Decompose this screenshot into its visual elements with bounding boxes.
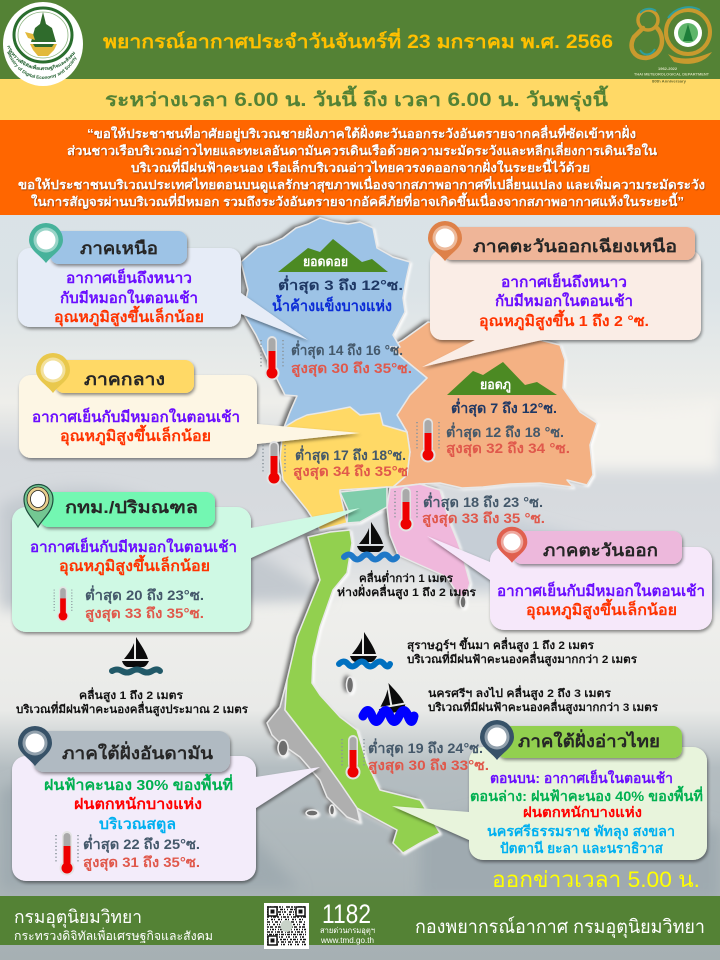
temperatures: north: ต่ำสุด 14 ถึง 16 °ซ. <box>291 340 403 359</box>
panel: north: อากาศเย็นถึงหนาว <box>66 268 192 287</box>
panel: north: กับมีหมอกในตอนเช้า <box>60 289 198 307</box>
warning banner: ในการสัญจรผ่านบริเวณที่มีหมอก รวมถึงระวังอันตรายจากอัคคีภัยที่อาจเกิดขึ้นเนื่องจากสภาพอากาศแห้งในระยะนี้” <box>31 192 684 209</box>
temperatures: north: สูงสุด 30 ถึง 35°ซ. <box>291 360 412 377</box>
temperatures: south: ต่ำสุด 19 ถึง 24°ซ. <box>368 738 483 757</box>
panel: northeast: อุณหภูมิสูงขึ้น 1 ถึง 2 °ซ. <box>479 309 649 331</box>
logo: ministry seal <box>3 2 83 86</box>
logo: 80th anniversary <box>632 7 712 83</box>
panel: northeast: ภาคตะวันออกเฉียงเหนือ <box>473 236 677 256</box>
mountain icon: Phu peak: ยอดภู <box>480 377 511 393</box>
panel: central: อุณหภูมิสูงขึ้นเล็กน้อย <box>60 424 211 446</box>
panel: south Gulf of Thailand: นครศรีธรรมราช พัทลุง สงขลา <box>487 823 675 840</box>
panel: north <box>18 223 308 340</box>
panel: central: ภาคกลาง <box>84 370 165 389</box>
footer: department name: กรมอุตุนิยมวิทยา <box>14 907 142 928</box>
panel: east: ภาคตะวันออก <box>543 541 658 560</box>
temperatures: northern peak: ต่ำสุด 3 ถึง 12°ซ. <box>278 275 403 294</box>
region: south Andaman <box>267 680 360 822</box>
temperatures: south <box>342 735 489 780</box>
region: northeast <box>390 322 597 488</box>
issue time: ออกข่าวเวลา 5.00 น. <box>492 867 700 892</box>
logo: 80th anniversary: 1962-2022 <box>658 66 678 71</box>
temperatures: south: สูงสุด 30 ถึง 33°ซ. <box>368 757 489 774</box>
panel: south Gulf of Thailand: ปัตตานี ยะลา และนราธิวาส <box>500 840 663 856</box>
QR code <box>264 903 309 949</box>
region: Bangkok <box>340 487 387 523</box>
hotline: www.tmd.go.th <box>320 936 374 945</box>
panel: south Gulf of Thailand: ตอนล่าง: ฝนฟ้าคะนอง 40% ของพื้นที่ <box>470 785 703 804</box>
panel: east: อุณหภูมิสูงขึ้นเล็กน้อย <box>526 598 677 620</box>
panel: Bangkok and vicinity: กทม./ปริมณฑล <box>65 498 198 517</box>
boat: Nakhon Si Thammarat: นครศรีฯ ลงไป คลื่นสูง 2 ถึง 3 เมตร <box>428 685 611 701</box>
footer: forecast division: กองพยากรณ์อากาศ กรมอุตุนิยมวิทยา <box>415 916 705 939</box>
warning banner: “ขอให้ประชาชนที่อาศัยอยู่บริเวณชายฝั่งภาคใต้ฝั่งตะวันออกระวังอันตรายจากคลื่นที่ซัดเข้าหาฝั่ง <box>87 125 636 142</box>
boat: Nakhon Si Thammarat: บริเวณที่มีฝนฟ้าคะนองคลื่นสูงมากกว่า 3 เมตร <box>428 699 658 715</box>
temperatures: east: ต่ำสุด 18 ถึง 23 °ซ. <box>423 492 543 511</box>
hotline: 1182 <box>322 899 371 929</box>
panel: south Andaman: สูงสุด 31 ถึง 35°ซ. <box>83 854 200 871</box>
panel: south Andaman: บริเวณสตูล <box>99 815 176 834</box>
logo: 80th anniversary: 80th Anniversary <box>652 80 686 84</box>
logo: ministry seal: กระทรวงดิจิทัลเพื่อเศรษฐกิจและสังคม <box>7 46 76 70</box>
temperatures: northeast peak: ต่ำสุด 7 ถึง 12°ซ. <box>451 398 557 417</box>
panel: east <box>427 527 712 630</box>
panel: south Andaman: ฝนฟ้าคะนอง 30% ของพื้นที่ <box>44 773 233 794</box>
temperatures: east <box>395 487 545 532</box>
panel: northeast: อากาศเย็นถึงหนาว <box>501 272 627 291</box>
hotline: สายด่วนกรมอุตุฯ <box>320 926 375 935</box>
map of Thailand <box>241 218 597 853</box>
boat: Andaman <box>16 637 248 717</box>
panel: northeast <box>422 221 701 367</box>
panel: south Andaman <box>12 726 320 881</box>
warning banner: ขอให้ประชาชนบริเวณประเทศไทยตอนบนดูแลรักษาสุขภาพเนื่องจากสภาพอากาศที่เปลี่ยนแปลง และเพิ่มความระมัดระวัง <box>18 176 705 193</box>
temperatures: central: สูงสุด 34 ถึง 35°ซ <box>293 463 409 480</box>
panel: south Gulf of Thailand: ตอนบน: อากาศเย็นในตอนเช้า <box>490 769 673 786</box>
temperatures: northern peak: น้ำค้างแข็งบางแห่ง <box>272 294 392 315</box>
panel: south Gulf of Thailand <box>392 720 707 860</box>
warning banner: บริเวณที่มีฝนฟ้าคะนอง เรือเล็กบริเวณอ่าวไทยควรงดออกจากฝั่งในระยะนี้ไว้ด้วย <box>131 158 590 175</box>
temperatures: northeast <box>417 418 570 462</box>
panel: south Andaman: ภาคใต้ฝั่งอันดามัน <box>62 741 213 763</box>
mountain icon: Doi peak: ยอดดอย <box>303 254 348 269</box>
region: north <box>241 218 427 445</box>
title: พยากรณ์อากาศประจำวันจันทร์ที่ 23 มกราคม พ.ศ. 2566 <box>103 28 613 53</box>
temperatures: northern peak <box>272 275 403 315</box>
boat: Andaman: คลื่นสูง 1 ถึง 2 เมตร <box>79 687 183 703</box>
panel: central: อากาศเย็นกับมีหมอกในตอนเช้า <box>32 407 240 426</box>
region: south Gulf <box>285 530 440 853</box>
warning banner <box>0 120 720 215</box>
subtitle band <box>0 79 720 120</box>
temperatures: central: ต่ำสุด 17 ถึง 18°ซ. <box>295 445 406 464</box>
panel: north: ภาคเหนือ <box>80 238 158 258</box>
panel: south Andaman: ต่ำสุด 22 ถึง 25°ซ. <box>83 834 200 853</box>
hotline <box>320 899 375 945</box>
region: central <box>280 407 410 530</box>
panel: north: อุณหภูมิสูงขึ้นเล็กน้อย <box>54 305 204 327</box>
boat: Surat <box>339 632 637 667</box>
panel: northeast: กับมีหมอกในตอนเช้า <box>495 292 633 310</box>
temperatures: north <box>261 336 412 380</box>
panel: Bangkok and vicinity: สูงสุด 33 ถึง 35°ซ. <box>85 605 204 622</box>
mountain icon: Phu peak <box>447 362 557 395</box>
footer: department name: กระทรวงดิจิทัลเพื่อเศรษฐกิจและสังคม <box>14 927 213 943</box>
boat: Surat: บริเวณที่มีฝนฟ้าคะนองคลื่นสูงมากกว่า 2 เมตร <box>407 651 637 667</box>
boat: upper gulf <box>337 522 476 600</box>
panel: Bangkok and vicinity: ต่ำสุด 20 ถึง 23°ซ. <box>85 585 204 604</box>
panel: south Andaman: ฝนตกหนักบางแห่ง <box>74 796 202 813</box>
temperatures: northeast: ต่ำสุด 12 ถึง 18 °ซ. <box>446 422 564 441</box>
temperatures: northeast: สูงสุด 32 ถึง 34 °ซ. <box>446 440 570 457</box>
temperatures: central <box>263 441 409 486</box>
boat: Andaman: บริเวณที่มีฝนฟ้าคะนองคลื่นสูงประมาณ 2 เมตร <box>16 701 248 717</box>
footer: department name <box>14 907 213 943</box>
panel: Bangkok and vicinity <box>12 484 360 632</box>
mountain icon: Doi peak <box>278 239 388 272</box>
subtitle band: ระหว่างเวลา 6.00 น. วันนี้ ถึง เวลา 6.00 น. วันพรุ่งนี้ <box>105 85 610 112</box>
header band <box>0 0 720 80</box>
warning banner: ส่วนชาวเรือบริเวณอ่าวไทยและทะเลอันดามันควรเดินเรือด้วยความระมัดระวังและหลีกเลี่ยงการเดินเรือใน <box>67 142 657 158</box>
islands <box>278 596 466 816</box>
boat: upper gulf: คลื่นต่ำกว่า 1 เมตร <box>359 570 453 585</box>
panel: central <box>19 353 360 458</box>
region: east <box>387 484 470 600</box>
panel: south Gulf of Thailand: ฝนตกหนักบางแห่ง <box>523 804 642 820</box>
panel: Bangkok and vicinity: อากาศเย็นกับมีหมอกในตอนเช้า <box>30 537 237 556</box>
panel: Bangkok and vicinity: อุณหภูมิสูงขึ้นเล็กน้อย <box>59 554 210 576</box>
temperatures: east: สูงสุด 33 ถึง 35 °ซ. <box>422 510 545 527</box>
boat: upper gulf: ห่างฝั่งคลื่นสูง 1 ถึง 2 เมตร <box>337 584 476 600</box>
panel: south Gulf of Thailand: ภาคใต้ฝั่งอ่าวไทย <box>518 729 660 751</box>
boat: Nakhon Si Thammarat <box>363 681 658 722</box>
logo: 80th anniversary: THAI METEOROLOGICAL DEPARTMENT <box>634 72 710 76</box>
boat: Surat: สุราษฎร์ฯ ขึ้นมา คลื่นสูง 1 ถึง 2 เมตร <box>407 637 594 653</box>
logo: ministry seal: Ministry of Digital Economy and Society <box>7 51 76 79</box>
panel: east: อากาศเย็นกับมีหมอกในตอนเช้า <box>497 581 705 600</box>
footer band <box>0 896 720 945</box>
